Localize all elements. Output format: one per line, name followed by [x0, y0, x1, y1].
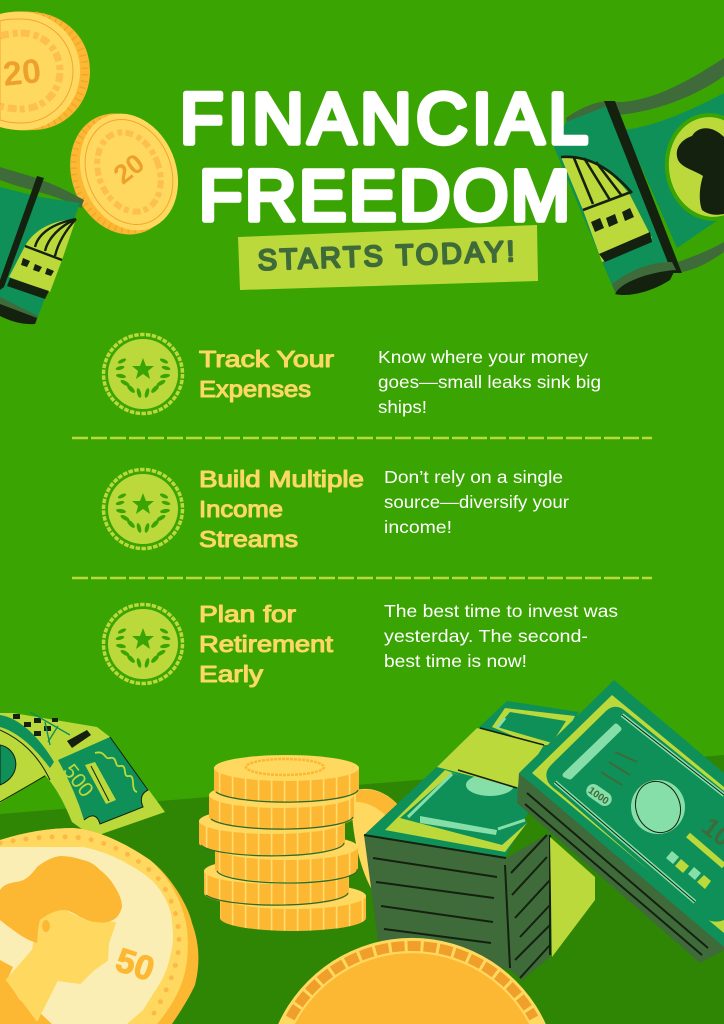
text: plan for retirement early: best time is now! [384, 651, 527, 671]
heading: plan for retirement early [199, 601, 334, 687]
icon: rolled banknote left [0, 167, 84, 324]
text: plan for retirement early [384, 601, 618, 671]
text: build multiple income streams: income! [384, 517, 452, 537]
icon: top banknote bundle [517, 680, 724, 963]
icon: coin 20 centre left: 20 [108, 148, 150, 190]
icon: coin 20 top left: 20 [1, 52, 43, 94]
icon: coin 50: 50 [111, 941, 159, 989]
icon: coin 20 centre left [52, 98, 195, 250]
icon: bottom coin [278, 938, 546, 1024]
subtitle banner: STARTS TODAY! [257, 236, 515, 277]
icon: rolled banknote right [554, 58, 724, 295]
heading: track your expenses: Track Your [199, 346, 334, 372]
heading: build multiple income streams: Income [199, 496, 283, 522]
icon: top banknote bundle: 1000 [586, 785, 611, 807]
text: track your expenses: ships! [378, 397, 427, 417]
icon: badge 1 [104, 334, 182, 414]
heading: track your expenses: Expenses [199, 376, 311, 402]
icon: 500 banknote: 500 [58, 760, 98, 802]
heading: track your expenses [199, 346, 334, 402]
heading: build multiple income streams: Streams [199, 526, 298, 552]
icon: banknote stack [364, 701, 595, 980]
text: track your expenses: Know where your money [378, 347, 588, 367]
heading: plan for retirement early: Early [199, 661, 264, 687]
icon: badge 2 [104, 470, 182, 548]
text: plan for retirement early: yesterday. The second- [384, 626, 588, 646]
text: build multiple income streams [384, 467, 569, 537]
icon: badge 3 [104, 604, 182, 684]
heading: plan for retirement early: Retirement [199, 631, 334, 657]
subtitle banner [238, 225, 538, 290]
title: FINANCIAL [180, 80, 588, 159]
coin 2 [209, 782, 354, 830]
ground [0, 755, 724, 1024]
icon: coin 50 [0, 828, 198, 1024]
text: track your expenses: goes—small leaks sink big [378, 372, 601, 392]
coin 1 [214, 755, 359, 803]
text: track your expenses [378, 347, 601, 417]
coin behind stack [352, 789, 398, 890]
icon: coin 20 top left [0, 11, 90, 130]
coin 3 [199, 808, 345, 856]
coin 5 [204, 858, 349, 906]
icon: coin stack [199, 755, 398, 931]
text: build multiple income streams: Don’t rely on a single [384, 467, 563, 487]
heading: build multiple income streams [199, 466, 364, 552]
text: plan for retirement early: The best time to invest was [384, 601, 618, 621]
text: build multiple income streams: source—diversify your [384, 492, 569, 512]
heading: plan for retirement early: Plan for [199, 601, 296, 627]
title [180, 80, 588, 236]
icon: 500 banknote [0, 712, 165, 837]
coin 4 [215, 834, 358, 883]
coin 6 [220, 883, 366, 931]
heading: build multiple income streams: Build Multiple [199, 466, 364, 492]
title: FREEDOM [199, 157, 570, 236]
